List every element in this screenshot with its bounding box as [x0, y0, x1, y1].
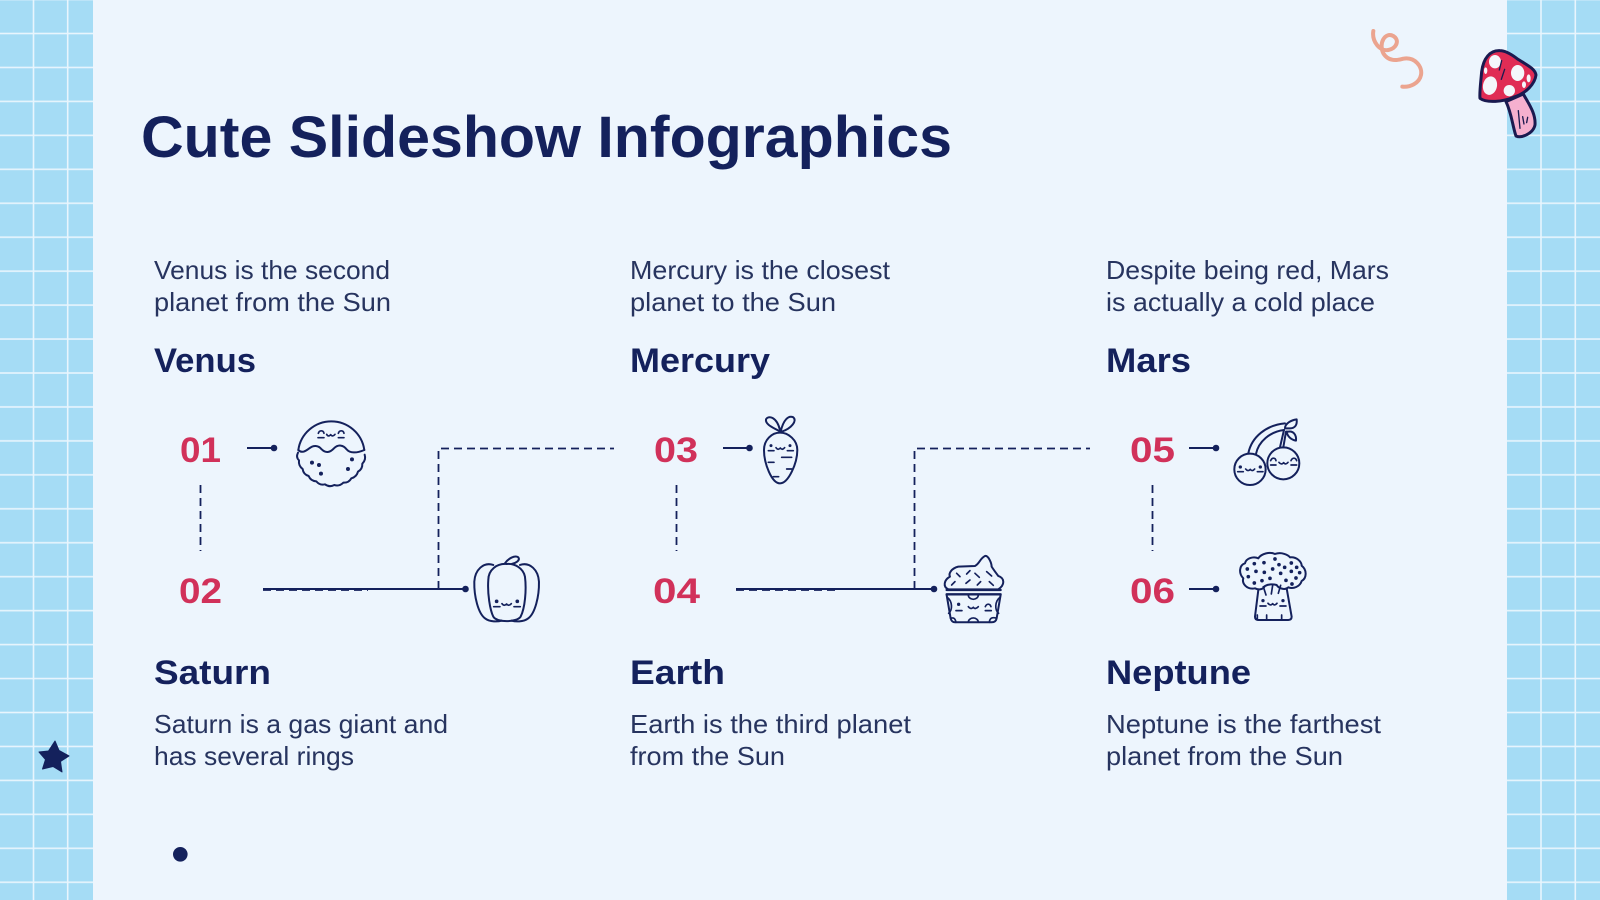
text block: Mars description — [1106, 255, 1389, 317]
number: 04: 04 — [653, 572, 701, 611]
text block: Venus description — [154, 255, 391, 317]
decoration: star — [39, 741, 69, 772]
connector: 01 to cookie — [247, 445, 277, 451]
panel: right grid band — [1507, 0, 1600, 900]
heading: Neptune: Neptune — [1106, 654, 1251, 692]
text block: Saturn description: has several rings — [154, 741, 354, 771]
heading: Mercury: Mercury — [630, 342, 770, 380]
text block: Saturn description: Saturn is a gas giant and — [154, 709, 448, 739]
connector: column 1 to column 2 — [438, 448, 614, 589]
connector: 01 to 02 — [200, 485, 202, 551]
text block: Venus description: planet from the Sun — [154, 287, 391, 317]
text block: Mercury description: Mercury is the closest — [630, 255, 891, 285]
icon: carrot — [764, 417, 797, 483]
connector: 06 to broccoli — [1189, 586, 1219, 592]
icon: cupcake — [945, 556, 1003, 622]
heading: Venus: Venus — [154, 342, 256, 380]
decoration: dot — [173, 847, 188, 862]
title: Cute Slideshow Infographics — [141, 105, 952, 170]
text block: Neptune description — [1106, 709, 1382, 771]
connector: 03 to carrot — [723, 445, 753, 451]
number: 02: 02 — [179, 572, 222, 611]
text block: Venus description: Venus is the second — [154, 255, 390, 285]
heading: Earth: Earth — [630, 654, 725, 692]
text block: Saturn description — [154, 709, 448, 771]
text block: Mercury description — [630, 255, 891, 317]
icon: cherries — [1234, 419, 1299, 485]
connector: column 2 to column 3 — [914, 448, 1090, 589]
number: 06: 06 — [1130, 572, 1175, 611]
number: 01: 01 — [180, 431, 221, 470]
text block: Earth description: from the Sun — [630, 741, 785, 771]
text block: Mars description: is actually a cold place — [1106, 287, 1375, 317]
heading: Saturn: Saturn — [154, 654, 271, 692]
connector: 05 to cherries — [1189, 445, 1219, 451]
connector: 03 to 04 — [676, 485, 678, 551]
number: 03: 03 — [654, 431, 698, 470]
icon: bell pepper — [474, 557, 539, 621]
text block: Mars description: Despite being red, Mars — [1106, 255, 1389, 285]
panel: left grid band — [0, 0, 93, 900]
decoration: squiggle — [1373, 31, 1421, 87]
text block: Earth description — [630, 709, 912, 771]
icon: mushroom — [1480, 51, 1536, 137]
text block: Neptune description: Neptune is the farthest — [1106, 709, 1382, 739]
heading: Mars: Mars — [1106, 342, 1191, 380]
text block: Neptune description: planet from the Sun — [1106, 741, 1343, 771]
text block: Earth description: Earth is the third planet — [630, 709, 912, 739]
text block: Mercury description: planet to the Sun — [630, 287, 836, 317]
icon: cookie — [297, 421, 365, 486]
connector: 05 to 06 — [1152, 485, 1154, 551]
number: 05: 05 — [1130, 431, 1175, 470]
connector: 02 to pepper — [263, 586, 469, 592]
connector: 04 to cupcake — [736, 586, 937, 592]
icon: broccoli — [1240, 553, 1306, 620]
